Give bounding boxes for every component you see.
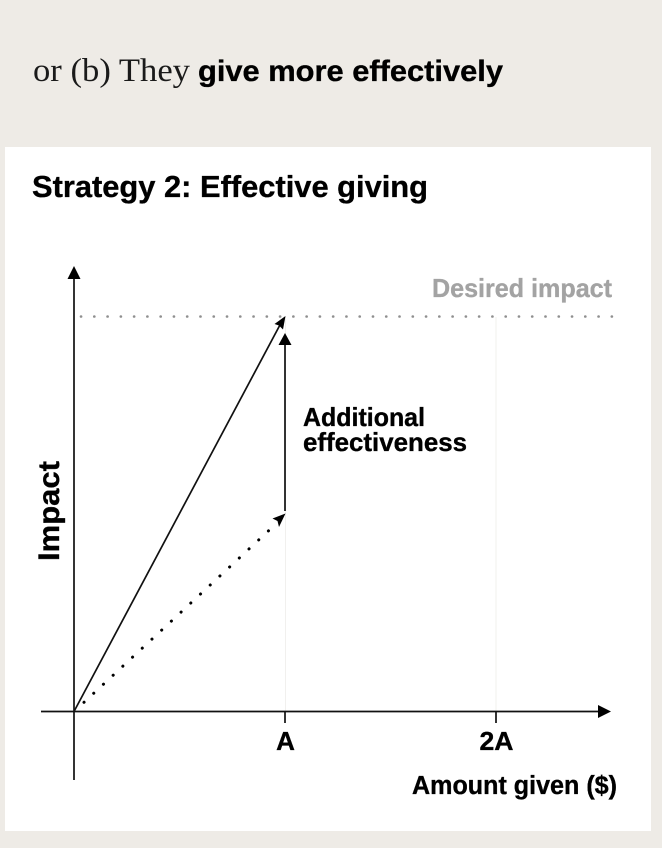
panel: strategy 2 chart — [5, 147, 651, 831]
x axis with arrow — [41, 705, 611, 718]
y axis with arrow — [68, 266, 80, 780]
x tick A: A — [276, 726, 295, 756]
gridlines — [286, 317, 496, 712]
y axis label: Impact — [33, 461, 66, 561]
dotted arrow: original giving — [84, 514, 286, 702]
x tick 2A — [480, 711, 514, 756]
x tick A — [276, 711, 295, 756]
x tick 2A: 2A — [480, 726, 514, 756]
x axis label: Amount given ($) — [412, 772, 617, 800]
solid arrow: effective giving — [74, 316, 286, 712]
lead-in sentence — [33, 53, 503, 89]
additional effectiveness label — [303, 402, 467, 457]
lead-in sentence: or (b) They — [33, 53, 191, 89]
additional effectiveness label: Additional — [303, 402, 425, 432]
vertical arrow: additional effectiveness — [278, 333, 292, 511]
additional effectiveness label: effectiveness — [303, 427, 467, 457]
heading: Strategy 2: Effective giving — [32, 169, 428, 204]
lead-in sentence: give more effectively — [198, 55, 503, 88]
desired impact label: Desired impact — [432, 273, 612, 303]
desired impact line — [81, 315, 612, 318]
